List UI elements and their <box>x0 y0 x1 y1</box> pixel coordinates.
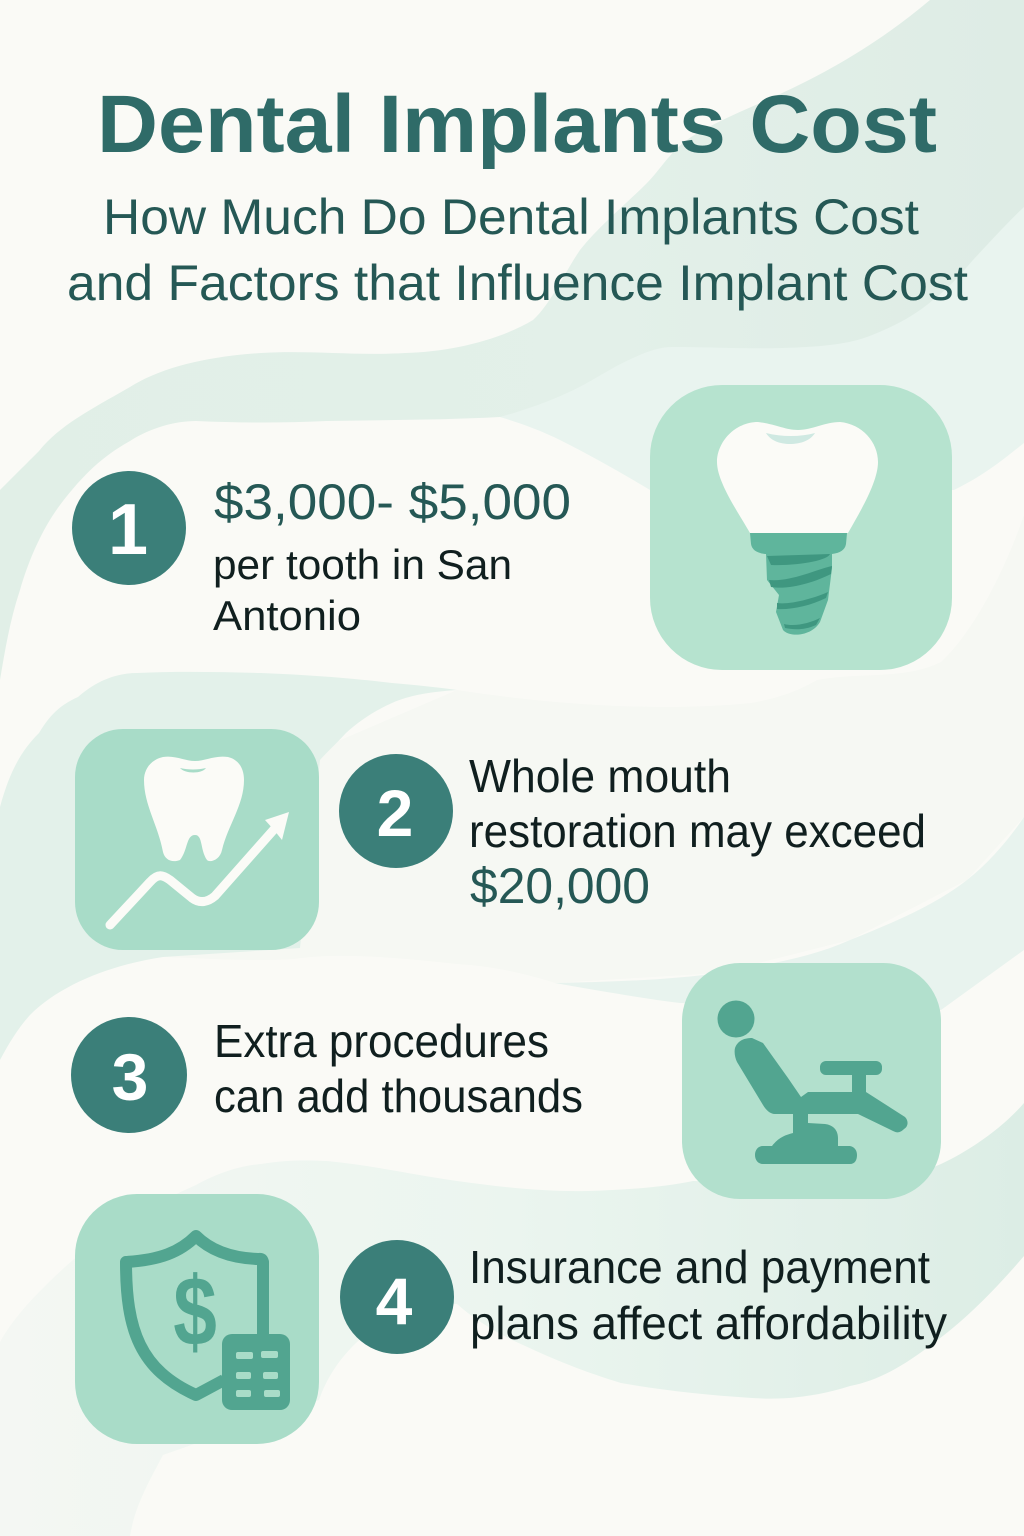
item 1 <box>72 385 952 670</box>
text: insurance and payment plans <box>469 1241 947 1349</box>
item 3 <box>71 963 941 1199</box>
icon: tooth with rising arrow <box>75 729 319 950</box>
number badge 1 <box>72 471 186 585</box>
subtitle: How Much Do Dental Implants Cost <box>103 189 919 245</box>
text: whole mouth restoration: restoration may exceed <box>469 805 926 857</box>
number badge 3 <box>71 1017 187 1133</box>
text: price per tooth: Antonio <box>213 592 361 639</box>
text: extra procedures: Extra procedures <box>214 1015 549 1067</box>
number badge 2: 2 <box>377 776 413 850</box>
number badge 3: 3 <box>112 1040 148 1114</box>
icon: insurance shield and calculator: $ <box>173 1257 217 1366</box>
icon: insurance shield and calculator <box>75 1194 319 1444</box>
text: insurance and payment plans: plans affect affordability <box>470 1297 947 1349</box>
subtitle <box>67 189 968 311</box>
text: price per tooth: $3,000- $5,000 <box>214 474 571 530</box>
icon: tooth implant <box>650 385 952 670</box>
subtitle: and Factors that Influence Implant Cost <box>67 255 968 311</box>
text: price per tooth <box>213 474 571 639</box>
text: whole mouth restoration <box>469 750 926 914</box>
icon: dental chair <box>682 963 941 1199</box>
text: whole mouth restoration: Whole mouth <box>469 750 731 802</box>
number badge 4: 4 <box>376 1264 413 1338</box>
number badge 2 <box>339 754 453 868</box>
text: extra procedures <box>214 1015 583 1122</box>
item 4 <box>75 1194 947 1444</box>
number badge 4 <box>340 1240 454 1354</box>
text: price per tooth: per tooth in San <box>213 541 512 588</box>
text: extra procedures: can add thousands <box>214 1070 583 1122</box>
item 2 <box>75 729 926 950</box>
text: whole mouth restoration: $20,000 <box>470 858 650 914</box>
text: insurance and payment plans: Insurance and payment <box>469 1241 930 1293</box>
title: Dental Implants Cost <box>97 79 937 170</box>
number badge 1: 1 <box>108 490 148 570</box>
